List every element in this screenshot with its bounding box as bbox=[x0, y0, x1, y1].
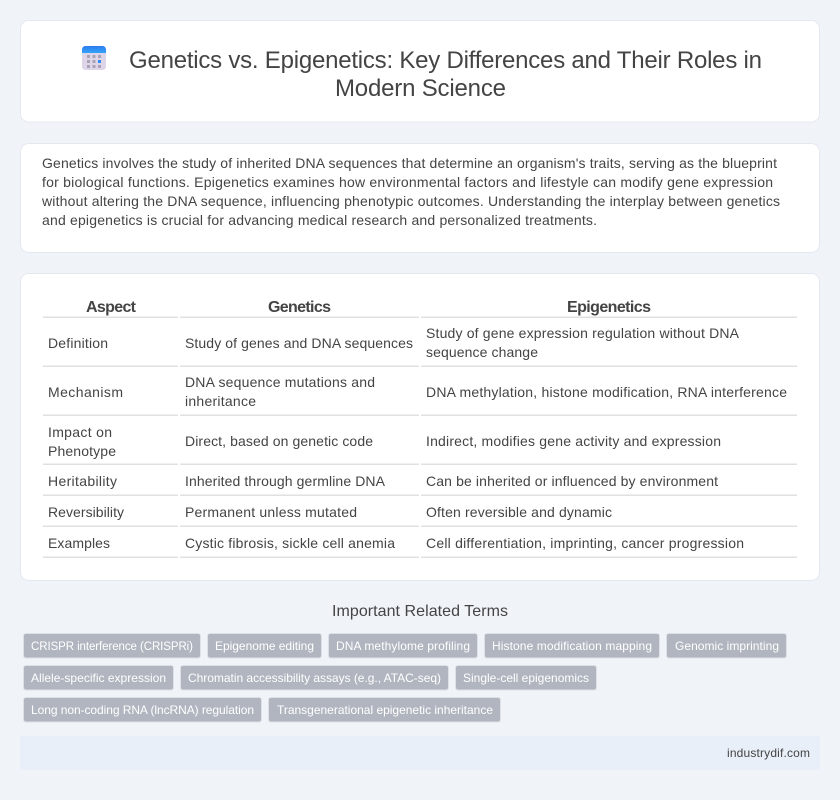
panel: introduction bbox=[20, 144, 820, 252]
row: impact on phenotype: Direct, based on genetic code bbox=[185, 433, 373, 449]
row: definition: Study of genes and DNA sequences bbox=[185, 335, 413, 351]
table header row: Epigenetics bbox=[567, 299, 651, 316]
row: heritability: Heritability bbox=[48, 473, 117, 489]
tag: histone modification mapping: Histone modification mapping bbox=[492, 639, 652, 653]
icon: calendar bbox=[82, 46, 106, 70]
tag: DNA methylome profiling bbox=[328, 634, 478, 658]
tag: chromatin accessibility assays: Chromatin accessibility assays (e.g., ATAC-seq) bbox=[188, 671, 441, 685]
title bbox=[129, 47, 762, 102]
row: examples bbox=[48, 535, 744, 551]
tag: genomic imprinting: Genomic imprinting bbox=[675, 639, 779, 653]
tag: lncRNA regulation bbox=[24, 698, 262, 722]
row: mechanism: inheritance bbox=[185, 393, 256, 409]
table header row bbox=[86, 299, 651, 316]
row: mechanism: DNA sequence mutations and bbox=[185, 374, 375, 390]
intro paragraph: for biological functions. Epigenetics examines how environmental factors and lifestyle can modify gene expression bbox=[42, 174, 773, 190]
related terms tags bbox=[24, 634, 786, 722]
row: definition: Study of gene expression regulation without DNA bbox=[426, 325, 740, 341]
row: definition: sequence change bbox=[426, 344, 538, 360]
title: Modern Science bbox=[335, 75, 506, 102]
tag: allele-specific expression bbox=[24, 666, 174, 690]
tag: epigenome editing: Epigenome editing bbox=[215, 639, 314, 653]
tag: histone modification mapping bbox=[484, 634, 660, 658]
row: heritability bbox=[48, 473, 718, 489]
intro paragraph: Genetics involves the study of inherited DNA sequences that determine an organism's traits, serving as the blueprint bbox=[42, 155, 777, 171]
tag: epigenome editing bbox=[208, 634, 322, 658]
tag: CRISPRi: CRISPR interference (CRISPRi) bbox=[31, 641, 193, 653]
tag: CRISPRi bbox=[24, 634, 200, 658]
row: definition: Definition bbox=[48, 335, 108, 351]
tag: transgenerational inheritance: Transgenerational epigenetic inheritance bbox=[277, 703, 493, 717]
row: examples: Examples bbox=[48, 535, 110, 551]
intro paragraph: without altering the DNA sequence, influencing phenotypic outcomes. Understanding the interplay between genetics bbox=[41, 193, 780, 209]
tag: single-cell epigenomics: Single-cell epigenomics bbox=[463, 671, 589, 685]
tag: lncRNA regulation: Long non-coding RNA (lncRNA) regulation bbox=[31, 703, 254, 717]
row: impact on phenotype: Impact on bbox=[48, 424, 112, 440]
table header row: Aspect bbox=[86, 299, 137, 316]
panel: header bbox=[20, 20, 820, 122]
row: reversibility: Reversibility bbox=[48, 504, 124, 520]
tag: DNA methylome profiling: DNA methylome profiling bbox=[336, 639, 470, 653]
row: mechanism bbox=[48, 374, 787, 409]
table header row: Genetics bbox=[268, 299, 331, 316]
row: reversibility: Often reversible and dynamic bbox=[426, 504, 612, 520]
row: examples: Cystic fibrosis, sickle cell anemia bbox=[185, 535, 395, 551]
intro paragraph bbox=[41, 155, 780, 228]
row: impact on phenotype: Indirect, modifies gene activity and expression bbox=[426, 433, 721, 449]
footer: industrydif.com bbox=[727, 746, 810, 760]
tag: transgenerational inheritance bbox=[268, 698, 500, 722]
footer bbox=[20, 736, 820, 770]
row: mechanism: Mechanism bbox=[48, 384, 123, 400]
row: reversibility bbox=[48, 504, 612, 520]
panel: comparison table bbox=[20, 274, 820, 580]
tag: chromatin accessibility assays bbox=[180, 666, 448, 690]
tag: genomic imprinting bbox=[666, 634, 786, 658]
intro paragraph: and epigenetics is crucial for advancing medical research and personalized treatments. bbox=[42, 212, 597, 228]
row: heritability: Inherited through germline DNA bbox=[185, 473, 386, 489]
row: impact on phenotype bbox=[48, 424, 721, 459]
row: reversibility: Permanent unless mutated bbox=[185, 504, 357, 520]
title: Genetics vs. Epigenetics: Key Differences and Their Roles in bbox=[129, 47, 762, 74]
related terms heading: Important Related Terms bbox=[332, 603, 508, 620]
row: examples: Cell differentiation, imprinting, cancer progression bbox=[426, 535, 744, 551]
table grid lines bbox=[43, 316, 797, 558]
tag: single-cell epigenomics bbox=[456, 666, 596, 690]
row: mechanism: DNA methylation, histone modification, RNA interference bbox=[426, 384, 787, 400]
tag: allele-specific expression: Allele-specific expression bbox=[31, 671, 166, 685]
row: impact on phenotype: Phenotype bbox=[48, 443, 116, 459]
row: definition bbox=[48, 325, 740, 360]
row: heritability: Can be inherited or influenced by environment bbox=[426, 473, 718, 489]
